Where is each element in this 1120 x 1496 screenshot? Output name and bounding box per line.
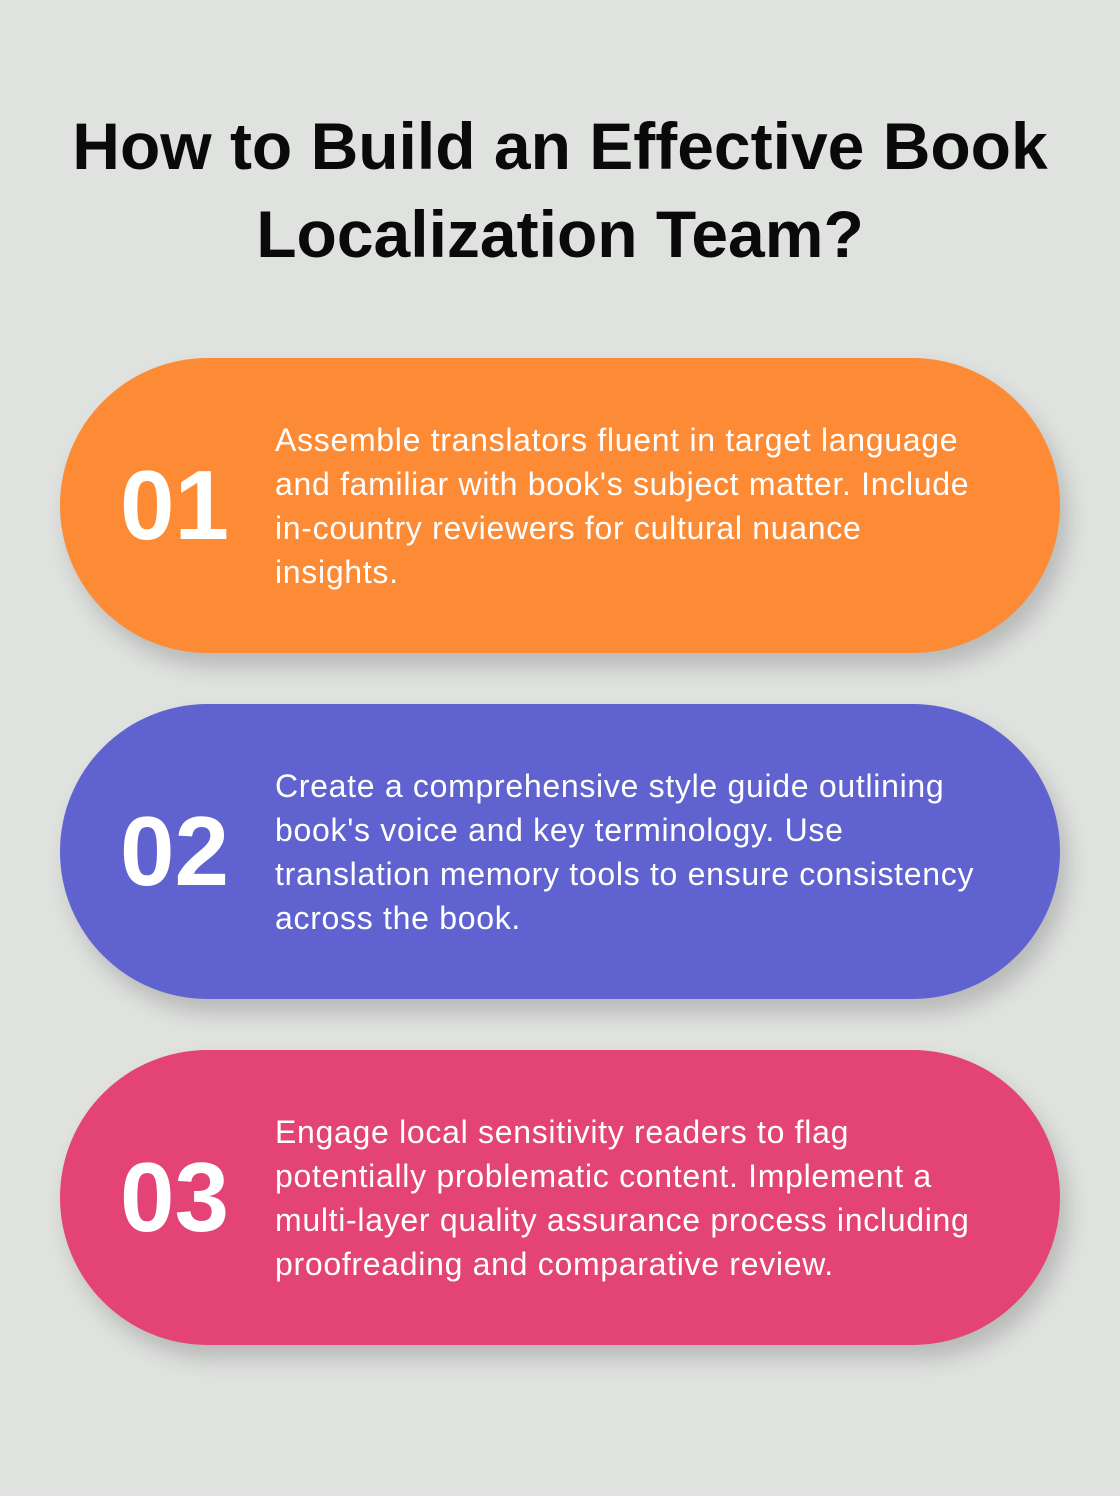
panel: step 01 (60, 358, 1060, 653)
text 03 (275, 1114, 970, 1282)
text 02 (275, 768, 974, 936)
text 01: insights. (275, 554, 399, 590)
title: Localization Team? (256, 197, 864, 271)
text 01: in-country reviewers for cultural nuance (275, 510, 861, 546)
text 02: translation memory tools to ensure consistency (275, 856, 974, 892)
number 03: 03 (120, 1142, 229, 1252)
text 03: proofreading and comparative review. (275, 1246, 834, 1282)
text 02: across the book. (275, 900, 521, 936)
text 01 (275, 422, 969, 590)
number 01: 01 (120, 450, 229, 560)
text 02: book's voice and key terminology. Use (275, 812, 844, 848)
panel: step 03 (60, 1050, 1060, 1345)
text 01: Assemble translators fluent in target language (275, 422, 958, 458)
title (72, 109, 1048, 271)
text 01: and familiar with book's subject matter. Include (275, 466, 969, 502)
text 03: multi-layer quality assurance process including (275, 1202, 970, 1238)
number 02: 02 (120, 796, 229, 906)
title: How to Build an Effective Book (72, 109, 1048, 183)
text 02: Create a comprehensive style guide outlining (275, 768, 944, 804)
text 03: potentially problematic content. Implement a (275, 1158, 932, 1194)
panel: step 02 (60, 704, 1060, 999)
text 03: Engage local sensitivity readers to flag (275, 1114, 849, 1150)
